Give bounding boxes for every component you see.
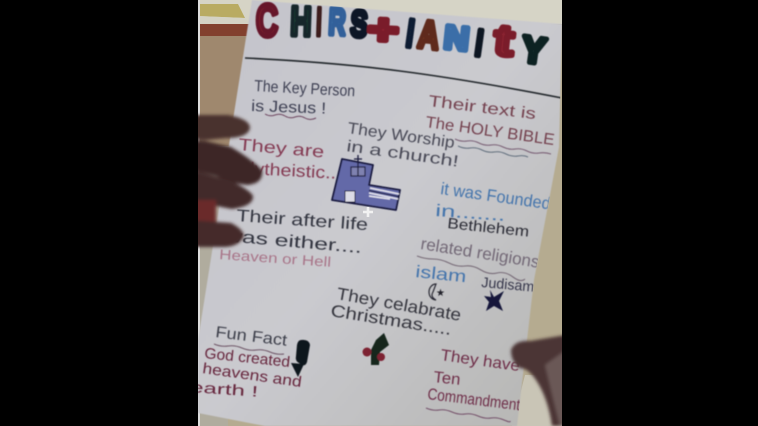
text: islam: islam [415, 262, 467, 286]
right hand thumb [511, 335, 566, 426]
text: Christmas: They celabrate [335, 284, 463, 325]
text: place of worship [346, 122, 458, 167]
text: holy book [426, 94, 555, 146]
icon: crescent and star: ★ [436, 288, 445, 299]
title: CHIRSTIANITY: R [328, 1, 347, 43]
title: CHIRSTIANITY: S [350, 3, 369, 45]
text: key person: is Jesus ! [251, 98, 326, 118]
text: fun fact: God created [204, 345, 291, 371]
text: holy book: The HOLY BIBLE [424, 114, 556, 149]
text: polytheistic: They are [238, 135, 325, 161]
title: CHIRSTIANITY: + [367, 5, 400, 54]
text: Christmas: Christmas..... [329, 301, 453, 339]
text: founded: it was Founded [439, 179, 552, 213]
icon: crescent and star [429, 284, 445, 300]
text: polytheistic [238, 138, 335, 180]
text: Bethlehem: Bethlehem [447, 215, 530, 241]
text: place of worship: They Worship [346, 120, 456, 152]
text: ten commandments [428, 348, 520, 411]
icon: star [484, 290, 504, 311]
title: CHIRSTIANITY: I [404, 12, 417, 56]
title: CHIRSTIANITY: Y [519, 28, 549, 72]
title: CHIRSTIANITY: I [473, 22, 486, 64]
text: afterlife: was either.... [222, 226, 363, 257]
text: fun fact [198, 347, 302, 398]
text: holy book: Their text is [428, 93, 537, 123]
text: afterlife: Their after life [236, 206, 369, 234]
text: heaven or hell: Heaven or Hell [219, 246, 332, 270]
text: Christmas [331, 286, 461, 336]
text: fun fact heading: Fun Fact [215, 324, 289, 350]
text: Judisam: Judisam [481, 275, 535, 296]
text: ten commandments: Ten [433, 369, 461, 389]
text: key person [251, 79, 355, 114]
text: afterlife [236, 208, 368, 254]
black side bars [0, 0, 198, 426]
text: founded: in....... [435, 201, 506, 225]
title: CHIRSTIANITY: A [416, 13, 441, 58]
text: fun fact: heavens and [201, 360, 303, 391]
text: place of worship: in a church! [345, 138, 460, 171]
title: CHIRSTIANITY: I [316, 1, 322, 44]
left hand fingers [190, 115, 566, 426]
text: polytheistic: polytheistic.. [228, 158, 337, 183]
photo backdrop [198, 0, 562, 426]
text: ten commandments: They have [439, 347, 521, 375]
cursor cross [363, 207, 373, 217]
icon: holly [362, 333, 389, 365]
icon: church [332, 155, 400, 210]
icon: exclamation mark [291, 340, 310, 377]
title: CHIRSTIANITY: N [442, 18, 471, 58]
divider under the title [245, 58, 562, 98]
text: key person: The Key Person [254, 78, 356, 100]
poster content [190, 0, 562, 422]
photo of hand-drawn Christianity poster [198, 0, 562, 426]
text: related religions: related religions [419, 234, 541, 272]
title: CHIRSTIANITY: t [492, 16, 516, 66]
text: ten commandments: Commandments [427, 386, 528, 415]
title: CHIRSTIANITY [256, 0, 549, 72]
paper sheet [198, 0, 562, 426]
text: fun fact: earth ! [190, 379, 259, 401]
